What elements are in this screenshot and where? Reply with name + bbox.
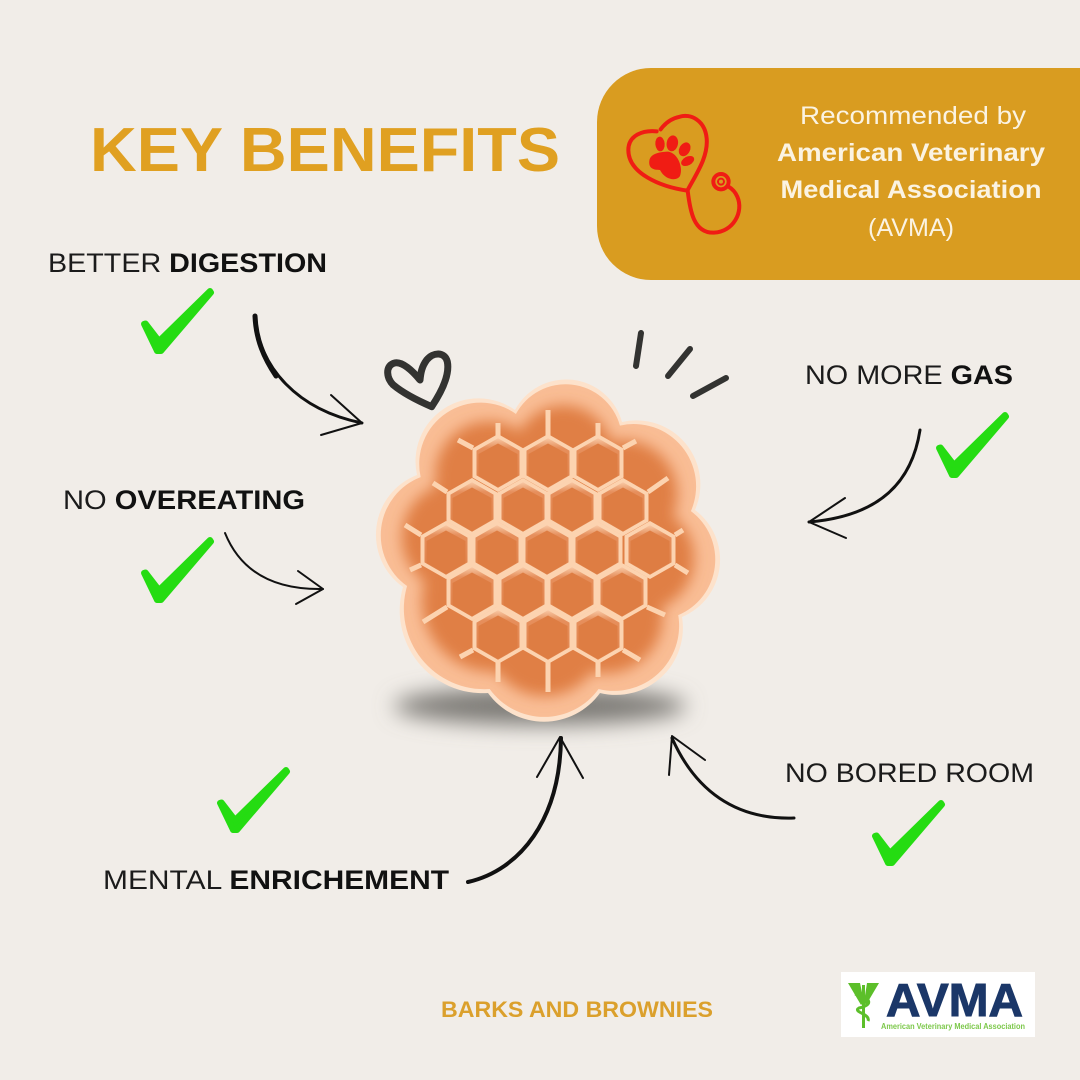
feeder rim <box>376 379 720 722</box>
recommendation text <box>777 102 1045 242</box>
feeder outer surface <box>381 384 715 717</box>
arrow: mental enrichement <box>468 737 583 882</box>
panel: AVMA recommendation <box>597 68 1080 280</box>
label: mental enrichement: MENTAL ENRICHEMENT <box>103 865 450 895</box>
recommendation text: Medical Association <box>780 176 1042 204</box>
label: no overeating: NO OVEREATING <box>63 485 305 515</box>
arrow: no overeating <box>225 533 323 604</box>
recommendation text: (AVMA) <box>868 214 954 242</box>
label: better digestion: BETTER DIGESTION <box>48 248 327 278</box>
feeder inner bowl shading <box>402 405 694 696</box>
icon: caduceus <box>848 983 879 1028</box>
check: no more gas <box>939 415 1006 475</box>
recommendation text: American Veterinary <box>777 139 1045 167</box>
check: no bored room <box>875 803 942 863</box>
check: better digestion <box>144 291 211 351</box>
logo: AVMA <box>841 972 1035 1037</box>
AVMA subtitle: American Veterinary Medical Association <box>881 1022 1025 1031</box>
honeycomb walls <box>420 434 676 664</box>
title: KEY BENEFITS <box>90 116 560 185</box>
doodle: heart <box>388 354 448 407</box>
recommendation text: Recommended by <box>800 102 1027 130</box>
label: no bored room: NO BORED ROOM <box>785 758 1034 788</box>
product: honeycomb slow feeder <box>376 379 720 722</box>
arrow: better digestion <box>255 316 362 435</box>
check: no overeating <box>144 540 211 600</box>
icon: stethoscope heart with paw <box>628 116 739 233</box>
honeycomb cells <box>424 438 672 660</box>
product shadow <box>394 687 686 725</box>
honeycomb wall spurs <box>405 410 688 692</box>
AVMA wordmark: AVMA <box>886 974 1023 1026</box>
doodle: emphasis ticks <box>636 333 726 396</box>
arrow: no bored room <box>669 736 794 818</box>
check: mental enrichment <box>220 770 287 830</box>
arrow: no more gas <box>809 430 920 538</box>
label: no more gas: NO MORE GAS <box>805 360 1013 390</box>
footer brand: BARKS AND BROWNIES <box>441 997 713 1022</box>
